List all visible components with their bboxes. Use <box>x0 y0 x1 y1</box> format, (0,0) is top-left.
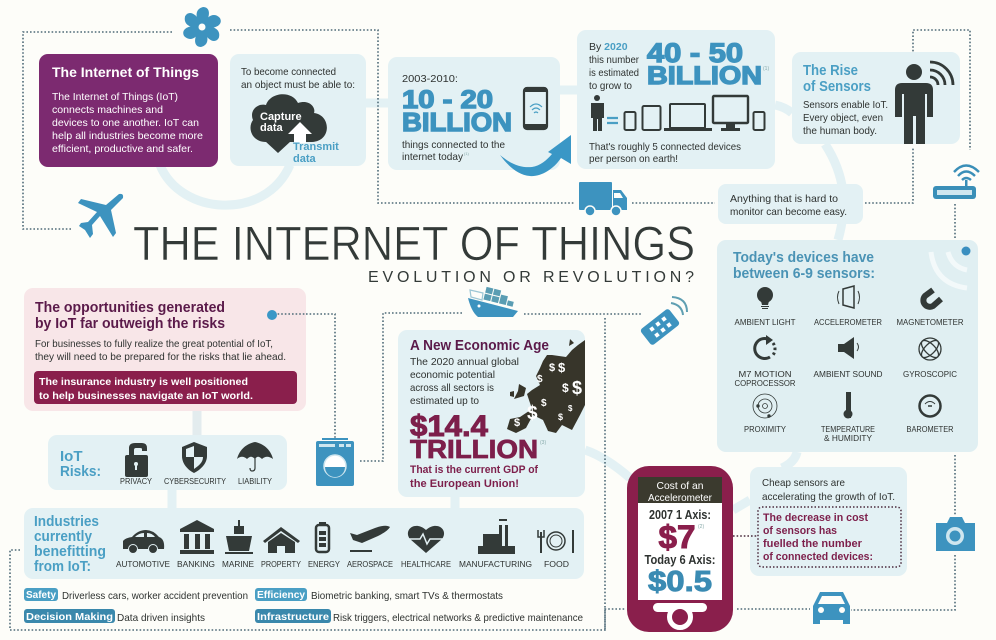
map: europe with dollar signs: $ <box>537 374 543 385</box>
callout: decrease in cost: The decrease in cost <box>763 512 868 524</box>
panel: a new economic age: $14.4 <box>410 410 488 443</box>
panel: a new economic age: The 2020 annual global <box>410 356 519 368</box>
panel: cost of an accelerometer phone <box>627 466 733 632</box>
intro text: efficient, productive and safer. <box>52 143 193 155</box>
icon: washing machine <box>316 438 354 486</box>
panel: today's devices sensors: Today's devices have <box>733 249 874 266</box>
icon: barometer <box>920 396 940 416</box>
panel: cost of an accelerometer phone: $7 <box>658 519 696 555</box>
map: europe with dollar signs: $ <box>568 404 573 413</box>
panel: capture and transmit: an object must be able to: <box>241 79 355 91</box>
phone header: Cost of an <box>656 480 704 492</box>
industry labels: PROPERTY <box>261 560 302 569</box>
intro text: The Internet of Things (IoT) <box>52 91 178 103</box>
panel: IoT risks: Risks: <box>60 463 101 480</box>
intro heading: The Internet of Things <box>52 64 199 80</box>
icon: proximity <box>753 394 777 418</box>
panel: a new economic age: TRILLION <box>410 434 538 464</box>
map: europe with dollar signs: $ <box>572 378 582 398</box>
panel: capture and transmit: To become connected <box>241 66 336 78</box>
icon: gyroscopic <box>919 338 941 360</box>
insurance callout: The insurance industry is well positioned <box>39 376 248 388</box>
blue dot marker with dotted lead <box>267 310 306 320</box>
panel: a new economic age <box>398 330 585 497</box>
industry labels: ENERGY <box>308 560 341 569</box>
icon: aerospace <box>350 526 390 552</box>
industry labels: AUTOMOTIVE <box>116 560 170 569</box>
panel: 10-20 billion: internet today <box>402 151 464 163</box>
callout: decrease in cost <box>733 507 901 567</box>
panel: opportunities and risks: The opportunities generated <box>35 299 225 316</box>
panel: cheap sensors: Cheap sensors are <box>762 477 845 489</box>
icon: motion coprocessor <box>755 335 775 358</box>
panel: 10-20 billion: BILLION <box>402 107 512 137</box>
industry labels: HEALTHCARE <box>401 560 451 569</box>
icon: container ship <box>468 287 518 317</box>
callout: hard to monitor <box>718 184 863 224</box>
map: europe with dollar signs: $ <box>562 381 569 395</box>
panel: industries: benefitting <box>34 543 106 560</box>
panel: a new economic age: (3) <box>540 440 546 446</box>
icon: remote control <box>640 297 687 346</box>
panel: 10-20 billion <box>388 57 560 170</box>
phone header: Accelerometer <box>648 492 712 504</box>
title: THE INTERNET OF THINGS <box>133 218 695 271</box>
panel: industries: from IoT: <box>34 558 91 575</box>
panel: the rise of sensors: Sensors enable IoT. <box>803 99 888 111</box>
label: sensor names row 3: PROXIMITY <box>744 425 787 434</box>
panel: opportunities and risks <box>24 288 306 411</box>
panel: the rise of sensors: of Sensors <box>803 78 871 95</box>
map: europe with dollar signs: $ <box>549 362 555 374</box>
panel: 40-50 billion: per person on earth! <box>589 153 678 165</box>
industry labels: MANUFACTURING <box>459 560 532 569</box>
panel: 10-20 billion: 10 - 20 <box>402 86 493 114</box>
benefit: safety <box>24 588 248 602</box>
panel: a new economic age: across all sectors is <box>410 382 494 394</box>
label: sensor names row 2 <box>734 370 957 388</box>
panel: opportunities and risks: by IoT far outweigh the risks <box>35 315 225 332</box>
icon: cloud with arrows <box>251 94 327 153</box>
map: europe with dollar signs: $ <box>527 403 538 424</box>
panel: cost of an accelerometer phone: Today 6 Axis: <box>644 553 716 567</box>
panel: cheap sensors: accelerating the growth of IoT. <box>762 491 895 503</box>
label: sensor names row 3: BAROMETER <box>906 425 954 434</box>
panel: 40-50 billion: 40 - 50 <box>647 38 743 68</box>
icon: thermometer <box>844 392 852 418</box>
icon: truck <box>579 182 627 216</box>
icon: person with sensor waves <box>895 62 953 144</box>
panel: a new economic age: A New Economic Age <box>410 337 549 354</box>
label: sensor names row 1 <box>734 318 964 327</box>
label: sensor names row 2: AMBIENT SOUND <box>814 370 883 379</box>
label: sensor names row 1: MAGNETOMETER <box>896 318 964 327</box>
panel: IoT risks: PRIVACY <box>120 477 153 486</box>
panel: cheap sensors <box>733 467 907 576</box>
map: europe with dollar signs: $ <box>558 412 563 422</box>
panel: the rise of sensors <box>792 52 960 144</box>
panel: the rise of sensors: The Rise <box>803 62 858 79</box>
intro text: connects machines and <box>52 104 163 116</box>
panel: 40-50 billion: this number <box>589 54 639 66</box>
benefit: efficiency: Biometric banking, smart TVs & thermostats <box>311 590 503 602</box>
icon: automotive <box>123 530 164 554</box>
panel: a new economic age: That is the current GDP of <box>410 464 538 476</box>
panel: capture and transmit: data <box>293 153 316 165</box>
benefit: infrastructure <box>255 609 583 624</box>
icon: plane <box>78 194 123 238</box>
label: sensor names row 3: & HUMIDITY <box>824 434 873 443</box>
benefit: decision making: Decision Making <box>26 612 113 623</box>
panel: the internet of things intro <box>39 54 218 167</box>
icon: cloud with arrows: Capture <box>260 111 302 123</box>
panel: 40-50 billion: BILLION <box>647 62 762 90</box>
panel: cost of an accelerometer phone: 2007 1 Axis: <box>649 508 711 522</box>
panel: IoT risks: IoT <box>60 448 82 465</box>
panel: capture and transmit: Transmit <box>293 141 339 153</box>
panel: industries <box>24 508 584 579</box>
label: sensor names row 2: GYROSCOPIC <box>903 370 957 379</box>
label: sensor names row 1: ACCELEROMETER <box>814 318 882 327</box>
insurance callout: to help businesses navigate an IoT world. <box>39 390 253 402</box>
callout: hard to monitor: monitor can become easy. <box>730 206 847 218</box>
panel: 40-50 billion: By 2020 <box>589 41 628 53</box>
label: sensor names row 3 <box>744 425 954 443</box>
callout: hard to monitor: Anything that is hard to <box>730 193 838 205</box>
benefit: decision making <box>24 609 205 624</box>
panel: IoT risks <box>48 435 287 490</box>
industry labels: FOOD <box>544 560 569 569</box>
phone header <box>638 477 722 504</box>
panel: a new economic age: the European Union! <box>410 478 519 490</box>
panel: the rise of sensors: Every object, even <box>803 112 883 124</box>
icon: wifi router <box>933 166 979 199</box>
panel connectors <box>160 90 844 510</box>
panel: 40-50 billion: (1) <box>763 66 769 72</box>
panel: 40-50 billion <box>577 30 775 169</box>
icon: smartphone with wifi <box>524 88 547 129</box>
panel: cost of an accelerometer phone: $0.5 <box>648 566 712 598</box>
callout: decrease in cost: fuelled the number <box>763 538 863 550</box>
icon: fan <box>181 7 223 47</box>
panel: industries: Industries <box>34 513 99 530</box>
icon: energy <box>316 522 329 552</box>
industry labels <box>116 560 569 569</box>
panel: a new economic age: economic potential <box>410 369 495 381</box>
industry labels: AEROSPACE <box>347 560 393 569</box>
industry labels: MARINE <box>222 560 254 569</box>
icon: car <box>813 592 850 624</box>
panel: 40-50 billion: is estimated <box>589 67 639 79</box>
label: sensor names row 3: TEMPERATURE <box>821 425 875 434</box>
panel: opportunities and risks: they will need to be prepared for the risks that lie ahead. <box>35 351 286 363</box>
icon: food <box>538 530 573 553</box>
icon: accelerometer <box>838 286 860 308</box>
intro text <box>52 91 203 155</box>
icon: property <box>263 527 300 553</box>
phone button <box>653 603 707 628</box>
callout: decrease in cost: of sensors has <box>763 525 837 537</box>
benefit: efficiency: Efficiency <box>257 590 305 601</box>
panel: a new economic age: estimated up to <box>410 395 479 407</box>
icon: magnetometer <box>923 290 941 307</box>
benefit: decision making: Data driven insights <box>117 612 205 624</box>
icon: umbrella <box>237 442 273 471</box>
subtitle: EVOLUTION OR REVOLUTION? <box>368 269 694 286</box>
intro text: help all industries become more <box>52 130 203 142</box>
panel: 10-20 billion: (1) <box>464 151 470 156</box>
icon: camera <box>936 517 975 551</box>
icon: ambient sound <box>838 337 858 359</box>
insurance callout <box>34 371 297 404</box>
icon: manufacturing <box>478 519 515 554</box>
arrow: growth arrow <box>500 135 571 176</box>
panel: today's devices sensors: between 6-9 sensors: <box>733 265 875 282</box>
icon: banking <box>180 520 214 554</box>
icon: ambient light <box>757 287 773 309</box>
icon: lock <box>125 443 148 477</box>
panel: cost of an accelerometer phone: (2) <box>698 524 704 530</box>
label: sensor names row 2: COPROCESSOR <box>734 379 796 388</box>
panel: 40-50 billion: to grow to <box>589 80 632 92</box>
benefit: infrastructure: Risk triggers, electrical networks & predictive maintenance <box>333 612 583 624</box>
intro text: devices to one another. IoT can <box>52 117 199 129</box>
icon: healthcare <box>407 526 445 553</box>
industry labels: BANKING <box>177 560 215 569</box>
map: europe with dollar signs <box>507 339 585 433</box>
panel: 10-20 billion: things connected to the <box>402 139 505 151</box>
callout: decrease in cost: of connected devices: <box>763 551 873 563</box>
panel: 10-20 billion: 2003-2010: <box>402 73 458 85</box>
benefit: safety: Driverless cars, worker accident prevention <box>62 590 248 602</box>
map: europe with dollar signs: $ <box>514 417 520 429</box>
panel: industries: currently <box>34 528 93 545</box>
icon: person equals devices <box>591 95 764 131</box>
panel: 40-50 billion: That's roughly 5 connected devices <box>589 141 741 153</box>
panel: today's devices sensors <box>717 240 978 452</box>
benefit: infrastructure: Infrastructure <box>257 612 329 623</box>
panel: capture and transmit <box>230 54 366 166</box>
panel: IoT risks: LIABILITY <box>238 477 273 486</box>
benefit: safety: Safety <box>26 590 56 601</box>
panel: the rise of sensors: the human body. <box>803 125 877 137</box>
benefit: efficiency <box>255 588 503 602</box>
map: europe with dollar signs: $ <box>541 398 547 409</box>
icon: cloud with arrows: data <box>260 122 284 134</box>
map: europe with dollar signs: $ <box>558 360 566 375</box>
panel: opportunities and risks: For businesses to fully realize the great potential of IoT, <box>35 338 273 350</box>
label: sensor names row 1: AMBIENT LIGHT <box>734 318 796 327</box>
icon: shield <box>182 442 207 473</box>
icon: marine <box>225 520 253 554</box>
panel: IoT risks: CYBERSECURITY <box>164 477 227 486</box>
label: sensor names row 2: M7 MOTION <box>738 370 792 379</box>
